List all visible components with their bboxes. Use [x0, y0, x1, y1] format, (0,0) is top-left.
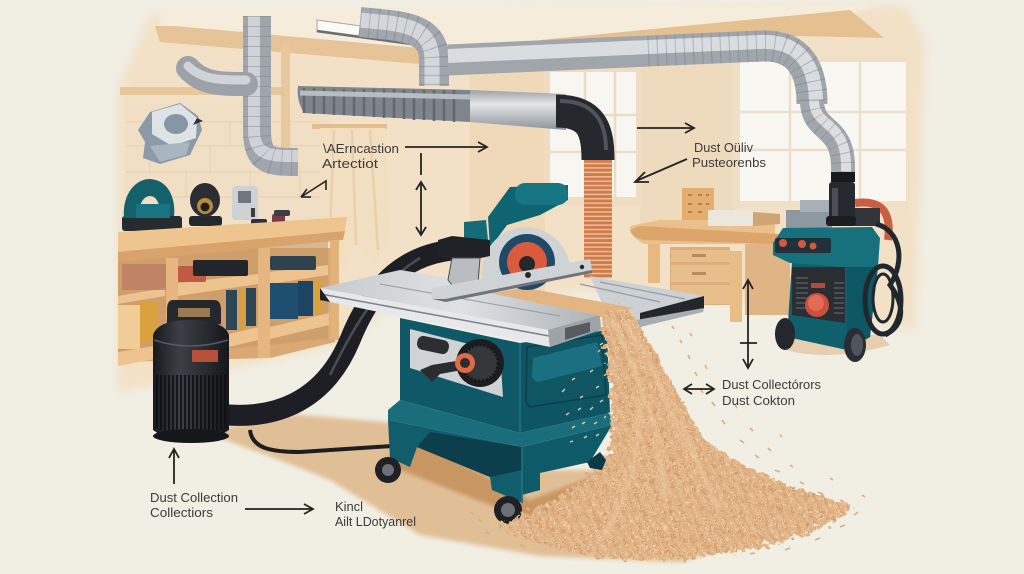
wall mounted face shield [138, 103, 203, 164]
black hose connector [438, 236, 490, 262]
arrow: up to canister [169, 449, 179, 484]
label: apron [322, 141, 399, 171]
wooden storage shelf [118, 217, 347, 366]
hanging apron [312, 124, 390, 268]
rip fence [432, 259, 592, 302]
label: duct: Pusteorenbs [692, 155, 766, 170]
drive cord [250, 430, 392, 452]
vacuum hose [205, 250, 452, 415]
label: dust collectors: Dust Cokton [722, 393, 795, 408]
table saw [320, 183, 704, 524]
body [787, 262, 878, 350]
control panel [410, 329, 504, 397]
label: air: Kincl [335, 499, 363, 514]
black dust extractor canister [153, 300, 229, 443]
label: dust collection: Collectiors [150, 505, 214, 520]
coiled hose [865, 224, 901, 335]
arrow: horizontal double [684, 384, 714, 394]
red pipe [855, 202, 889, 240]
control panel [775, 238, 831, 253]
room: wall and ceiling [118, 4, 925, 392]
stored boxes and binders [118, 256, 322, 349]
wheels [775, 318, 866, 362]
label: apron: \AErncastion [323, 141, 399, 156]
label: duct [692, 140, 766, 170]
right window [731, 58, 907, 208]
arrow: collection label to right [245, 504, 313, 514]
label: air: Ailt LDotyanrel [335, 514, 416, 529]
scattered chips [470, 326, 865, 554]
side door [526, 335, 606, 407]
motor housing [464, 183, 568, 248]
workbench [630, 188, 790, 322]
wood workpiece [490, 288, 634, 316]
black collar [826, 172, 856, 226]
main horizontal duct [298, 86, 566, 130]
arrow: apron label to wall [405, 142, 487, 152]
respirator [189, 183, 222, 226]
label: dust collection [150, 490, 238, 520]
label: dust collection: Dust Collection [150, 490, 238, 505]
ceiling light [317, 20, 420, 46]
small items [251, 210, 290, 225]
latch [532, 342, 602, 382]
floor shadow under saw [380, 440, 610, 520]
arrow: apron label to tools [301, 181, 326, 197]
shelf tools [122, 179, 290, 231]
gray meter box [232, 186, 258, 220]
sawdust stream and pile [470, 307, 865, 560]
extension wing [580, 276, 704, 327]
filter blocks [786, 200, 880, 230]
dust collector: right [773, 172, 901, 362]
green power tool [122, 179, 182, 231]
arrow: vertical double [416, 153, 426, 235]
left window [544, 66, 642, 206]
label: air [335, 499, 416, 529]
arrow: collector vertical double [740, 280, 757, 368]
black elbow and orange hose [556, 101, 612, 278]
casters [375, 457, 522, 524]
label: duct: Dust Oüliv [694, 140, 753, 155]
ceiling beams [120, 10, 884, 155]
cabinet [388, 318, 612, 503]
label: apron: Artectiot [322, 156, 378, 171]
grille and red knob [792, 267, 845, 323]
label: dust collectors [722, 377, 821, 408]
upper duct run [360, 20, 846, 172]
riving bracket [448, 258, 480, 290]
arrow: through window [637, 123, 694, 133]
label: dust collectors: Dust Collectórors [722, 377, 821, 392]
left wall duct [188, 16, 298, 162]
arrow: pointing to window [635, 159, 687, 182]
board and box on bench [682, 188, 780, 226]
saw table top [320, 270, 601, 347]
floor shading [205, 414, 820, 562]
saw blade and guard [482, 227, 570, 292]
